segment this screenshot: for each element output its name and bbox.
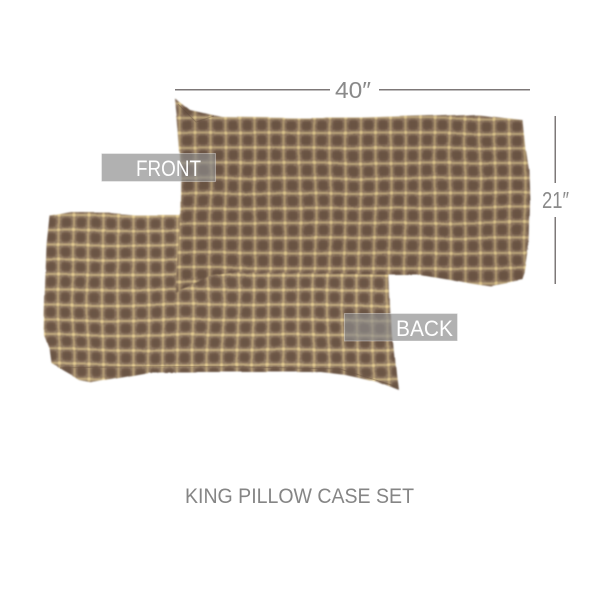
label: back: BACK bbox=[396, 316, 453, 341]
back pillow case bbox=[43, 212, 398, 391]
label: front: FRONT bbox=[136, 156, 201, 181]
front pillow case bbox=[175, 98, 530, 294]
width dimension: 40 inches: 40″ bbox=[335, 77, 371, 103]
label: front bbox=[102, 154, 216, 182]
caption: KING PILLOW CASE SET bbox=[185, 484, 414, 508]
label: back bbox=[344, 314, 458, 341]
height dimension: 21 inches: 21″ bbox=[542, 187, 569, 213]
